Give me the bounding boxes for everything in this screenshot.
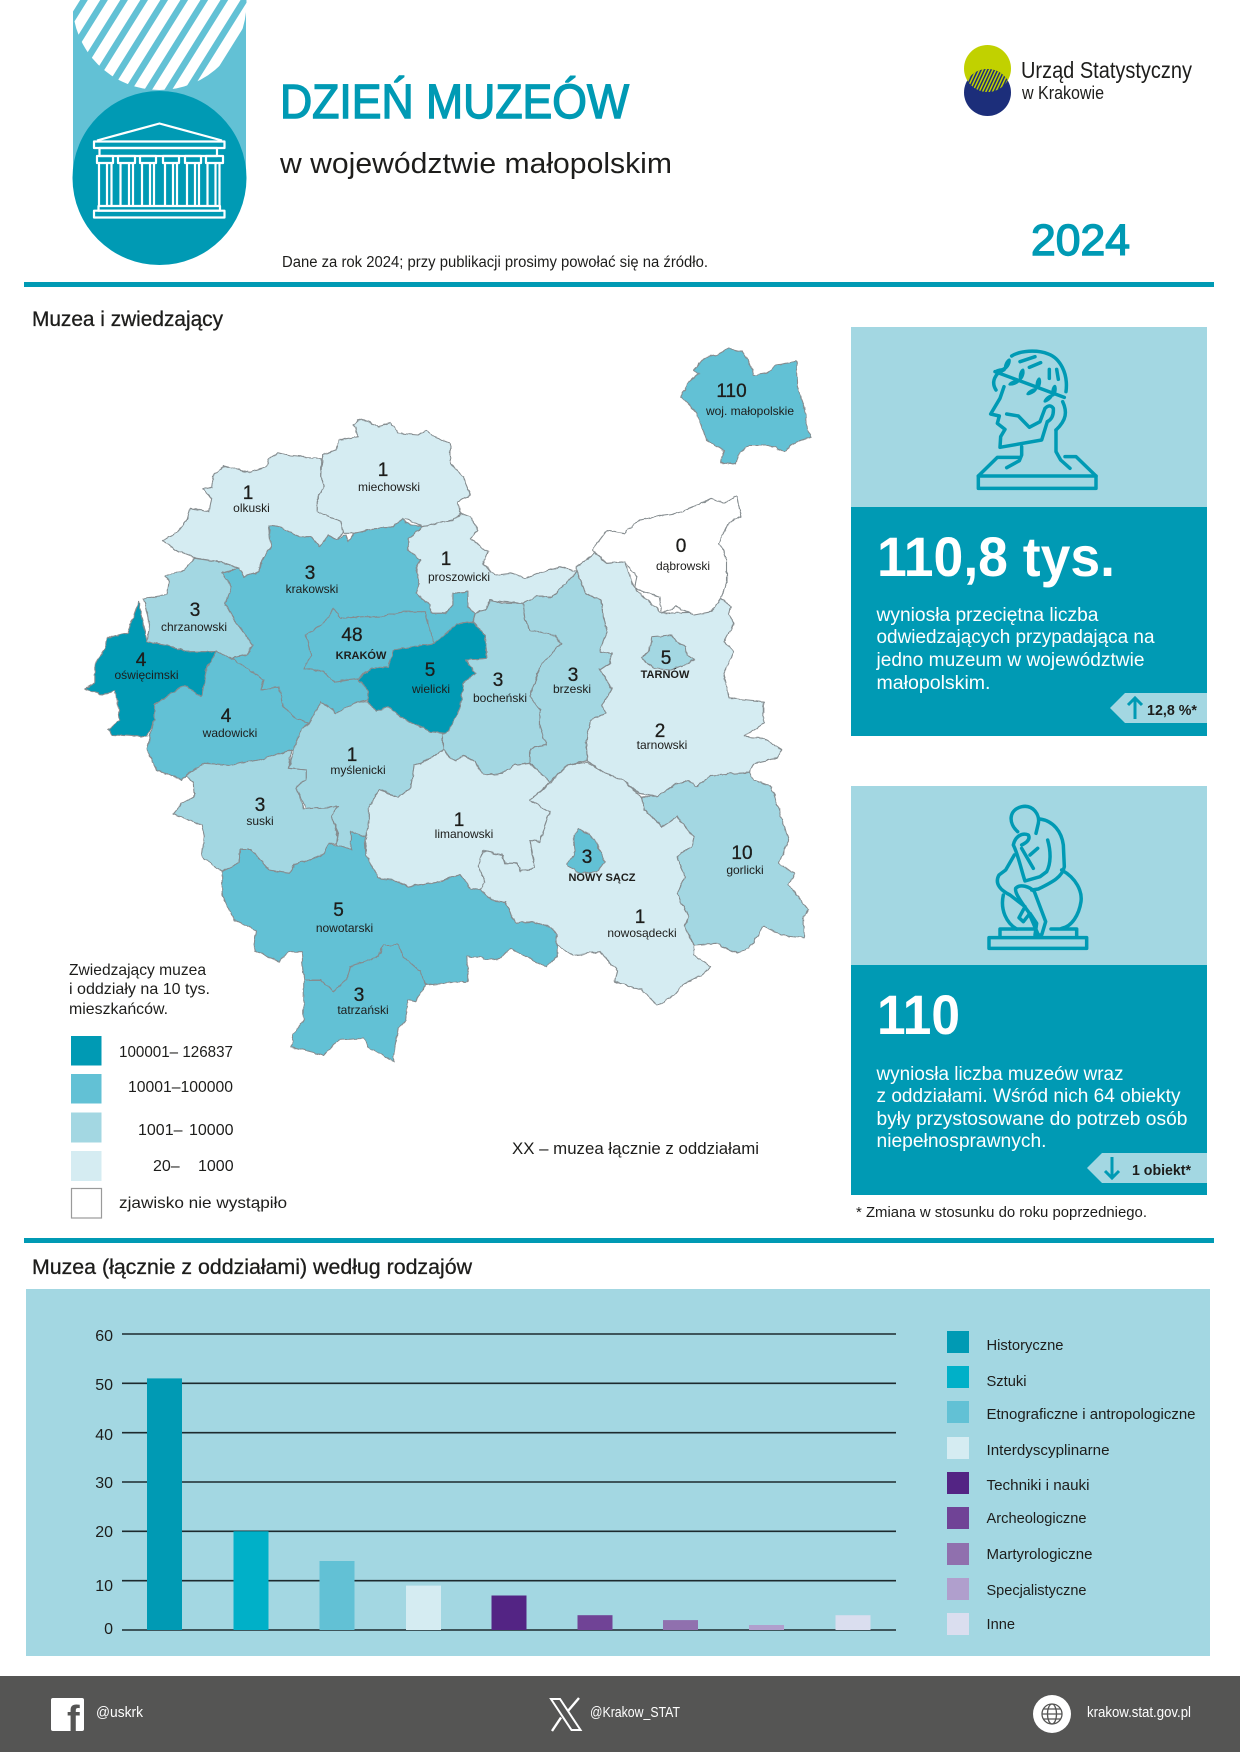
region: chrzanowski bbox=[144, 558, 253, 658]
map labels: myślenicki bbox=[330, 763, 386, 777]
big number: 110 bbox=[877, 983, 960, 1046]
map labels: TARNÓW bbox=[641, 668, 690, 681]
map labels: 1 bbox=[347, 745, 357, 766]
region: krakowski bbox=[222, 518, 475, 723]
map labels: 1 bbox=[441, 549, 451, 570]
description: jedno muzeum w województwie bbox=[875, 650, 1144, 671]
change tag bbox=[1110, 693, 1207, 723]
map labels: 3 bbox=[255, 795, 265, 816]
axis labels: 0 bbox=[104, 1621, 113, 1638]
description: niepełnosprawnych. bbox=[876, 1131, 1046, 1152]
map labels: tarnowski bbox=[637, 738, 687, 752]
map labels: limanowski bbox=[435, 827, 493, 841]
axis labels: 60 bbox=[95, 1328, 113, 1345]
change tag: 12,8 %* bbox=[1147, 702, 1197, 719]
map labels: proszowicki bbox=[428, 570, 490, 584]
map labels: brzeski bbox=[553, 682, 591, 696]
icon: X bbox=[551, 1698, 580, 1731]
region: wadowicki bbox=[147, 652, 309, 780]
region: olkuski bbox=[162, 453, 344, 576]
region: miechowski bbox=[316, 418, 470, 533]
icon: facebook: f bbox=[67, 1699, 80, 1741]
axis labels: 30 bbox=[95, 1475, 113, 1492]
panel: average visitors bbox=[851, 327, 1207, 736]
source note: Dane za rok 2024; przy publikacji prosimy powołać się na źródło. bbox=[282, 254, 708, 271]
region: dąbrowski bbox=[592, 496, 741, 615]
map labels: miechowski bbox=[358, 480, 420, 494]
region: wielicki bbox=[358, 622, 487, 733]
map labels: gorlicki bbox=[726, 863, 764, 877]
region: bocheński bbox=[443, 600, 561, 775]
chart legend: Etnograficzne i antropologiczne bbox=[986, 1406, 1196, 1423]
description: małopolskim. bbox=[876, 673, 990, 694]
map labels: 3 bbox=[568, 665, 578, 686]
description: odwiedzających przypadająca na bbox=[876, 627, 1155, 648]
map legend: 10000 bbox=[189, 1122, 234, 1139]
map legend: 10001–100000 bbox=[128, 1079, 233, 1096]
map labels: 5 bbox=[661, 648, 671, 669]
description: z oddziałami. Wśród nich 64 obiekty bbox=[876, 1086, 1181, 1107]
map labels: 0 bbox=[676, 536, 686, 557]
chart legend: Techniki i nauki bbox=[986, 1477, 1090, 1494]
map labels: olkuski bbox=[233, 501, 270, 515]
map labels: nowosądecki bbox=[607, 926, 677, 940]
map labels: NOWY SĄCZ bbox=[568, 872, 636, 884]
header decoration: column with striped circle and museum icon bbox=[72, 0, 246, 265]
map labels: 3 bbox=[354, 985, 364, 1006]
chart legend: Interdyscyplinarne bbox=[986, 1442, 1110, 1459]
chart legend: Sztuki bbox=[986, 1373, 1026, 1390]
map labels: KRAKÓW bbox=[336, 649, 387, 662]
chart legend: Specjalistyczne bbox=[986, 1582, 1086, 1599]
map labels: 1 bbox=[635, 907, 645, 928]
map labels: bocheński bbox=[473, 691, 527, 705]
region: oświęcimski bbox=[85, 602, 217, 737]
chart legend: Inne bbox=[986, 1616, 1015, 1633]
region: tarnowski bbox=[577, 553, 782, 797]
description: były przystosowane do potrzeb osób bbox=[876, 1109, 1188, 1130]
map labels: nowotarski bbox=[316, 921, 373, 935]
facebook handle: @uskrk bbox=[96, 1705, 144, 1721]
map labels: 2 bbox=[655, 721, 665, 742]
map labels: 3 bbox=[493, 670, 503, 691]
description bbox=[875, 605, 1155, 694]
map labels: 5 bbox=[425, 660, 435, 681]
arrow down bbox=[1105, 1157, 1119, 1178]
map: powiaty of Małopolska bbox=[85, 348, 811, 1062]
legend title: i oddziały na 10 tys. bbox=[69, 981, 210, 998]
legend title: mieszkańców. bbox=[69, 1001, 168, 1018]
map note: XX – muzea łącznie z oddziałami bbox=[512, 1139, 759, 1158]
axis labels: 20 bbox=[95, 1524, 113, 1541]
map labels: 4 bbox=[136, 650, 147, 671]
map legend bbox=[69, 962, 287, 1218]
icon: laurel bust bbox=[978, 351, 1096, 488]
map labels: 4 bbox=[221, 706, 232, 727]
axis labels bbox=[95, 1328, 113, 1638]
heading: museums by type: Muzea (łącznie z oddziałami) według rodzajów bbox=[32, 1256, 473, 1279]
map labels: dąbrowski bbox=[656, 559, 710, 573]
icon: facebook bbox=[51, 1698, 84, 1741]
chart legend bbox=[947, 1331, 1196, 1635]
map labels: 110 bbox=[716, 381, 747, 402]
map labels: woj. małopolskie bbox=[705, 404, 794, 418]
axis labels: 40 bbox=[95, 1427, 113, 1444]
region: nowotarski bbox=[222, 832, 557, 992]
map labels: 5 bbox=[333, 900, 344, 921]
panel: number of museums bbox=[851, 786, 1207, 1195]
map labels: suski bbox=[246, 814, 274, 828]
chart legend: Archeologiczne bbox=[986, 1510, 1086, 1527]
region: brzeski bbox=[523, 572, 612, 782]
region: Nowy Sącz bbox=[567, 828, 605, 873]
striped circle bbox=[72, 0, 246, 90]
subtitle: w województwie małopolskim bbox=[279, 148, 672, 180]
change tag: 1 obiekt* bbox=[1132, 1162, 1191, 1179]
region: nowosądecki bbox=[478, 762, 711, 1005]
map labels: 48 bbox=[341, 625, 363, 646]
region: myślenicki bbox=[289, 702, 443, 850]
logo: Urząd Statystyczny w Krakowie bbox=[964, 45, 1192, 116]
X handle: @Krakow_STAT bbox=[590, 1705, 680, 1721]
map legend: zjawisko nie wystąpiło bbox=[119, 1195, 287, 1212]
heading: Muzea i zwiedzający: Muzea i zwiedzający bbox=[32, 308, 223, 331]
bar chart bbox=[95, 1328, 896, 1638]
icon: thinker statue bbox=[989, 806, 1087, 948]
map labels: 10 bbox=[731, 843, 753, 864]
map labels: 1 bbox=[378, 460, 388, 481]
description: wyniosła liczba muzeów wraz bbox=[876, 1064, 1124, 1085]
map labels bbox=[114, 381, 794, 1017]
map labels: chrzanowski bbox=[161, 620, 227, 634]
map labels: oświęcimski bbox=[114, 668, 179, 682]
map labels: wadowicki bbox=[202, 726, 257, 740]
map labels: 1 bbox=[454, 810, 464, 831]
axis labels: 10 bbox=[95, 1578, 113, 1595]
map labels: krakowski bbox=[286, 582, 338, 596]
map labels: wielicki bbox=[411, 682, 450, 696]
website: krakow.stat.gov.pl bbox=[1087, 1705, 1191, 1721]
description bbox=[876, 1064, 1188, 1152]
teal circle bbox=[72, 91, 246, 265]
map legend: 20– bbox=[153, 1158, 180, 1175]
legend title: Zwiedzający muzea bbox=[69, 962, 206, 979]
region: suski bbox=[173, 750, 339, 873]
map labels: 3 bbox=[305, 563, 315, 584]
region: gorlicki bbox=[642, 773, 809, 953]
region: województwo małopolskie bbox=[681, 348, 811, 464]
icon: museum building bbox=[94, 124, 224, 218]
map legend: 100001– 126837 bbox=[119, 1044, 233, 1061]
map labels: 3 bbox=[190, 600, 200, 621]
region: Kraków bbox=[304, 608, 434, 682]
year: 2024 bbox=[1031, 216, 1130, 265]
map labels: 3 bbox=[582, 847, 592, 868]
footnote: * Zmiana w stosunku do roku poprzedniego. bbox=[856, 1204, 1147, 1221]
map labels: 1 bbox=[243, 483, 253, 504]
logo: Urząd Statystyczny w Krakowie: w Krakowie bbox=[1021, 83, 1104, 103]
icon: globe bbox=[1033, 1695, 1071, 1733]
map legend: 1000 bbox=[198, 1158, 234, 1175]
panel: chart background bbox=[26, 1289, 1210, 1656]
big number: 110,8 tys. bbox=[877, 525, 1115, 588]
chart legend: Martyrologiczne bbox=[986, 1546, 1092, 1563]
title: DZIEŃ MUZEÓW bbox=[280, 75, 630, 129]
map legend: 1001– bbox=[138, 1122, 183, 1139]
region: Tarnów bbox=[642, 635, 694, 670]
axis labels: 50 bbox=[95, 1377, 113, 1394]
region: limanowski bbox=[366, 750, 550, 890]
bars bbox=[147, 1378, 870, 1630]
region: tatrzański bbox=[291, 945, 426, 1062]
map labels: tatrzański bbox=[337, 1003, 389, 1017]
arrow up bbox=[1128, 698, 1142, 719]
change tag bbox=[1087, 1153, 1207, 1183]
region: proszowicki bbox=[408, 513, 577, 613]
description: wyniosła przeciętna liczba bbox=[875, 605, 1099, 626]
legend title bbox=[69, 962, 210, 1018]
logo: Urząd Statystyczny w Krakowie: Urząd Statystyczny bbox=[1021, 57, 1192, 83]
footer bbox=[0, 1676, 1240, 1752]
chart legend: Historyczne bbox=[986, 1337, 1064, 1354]
